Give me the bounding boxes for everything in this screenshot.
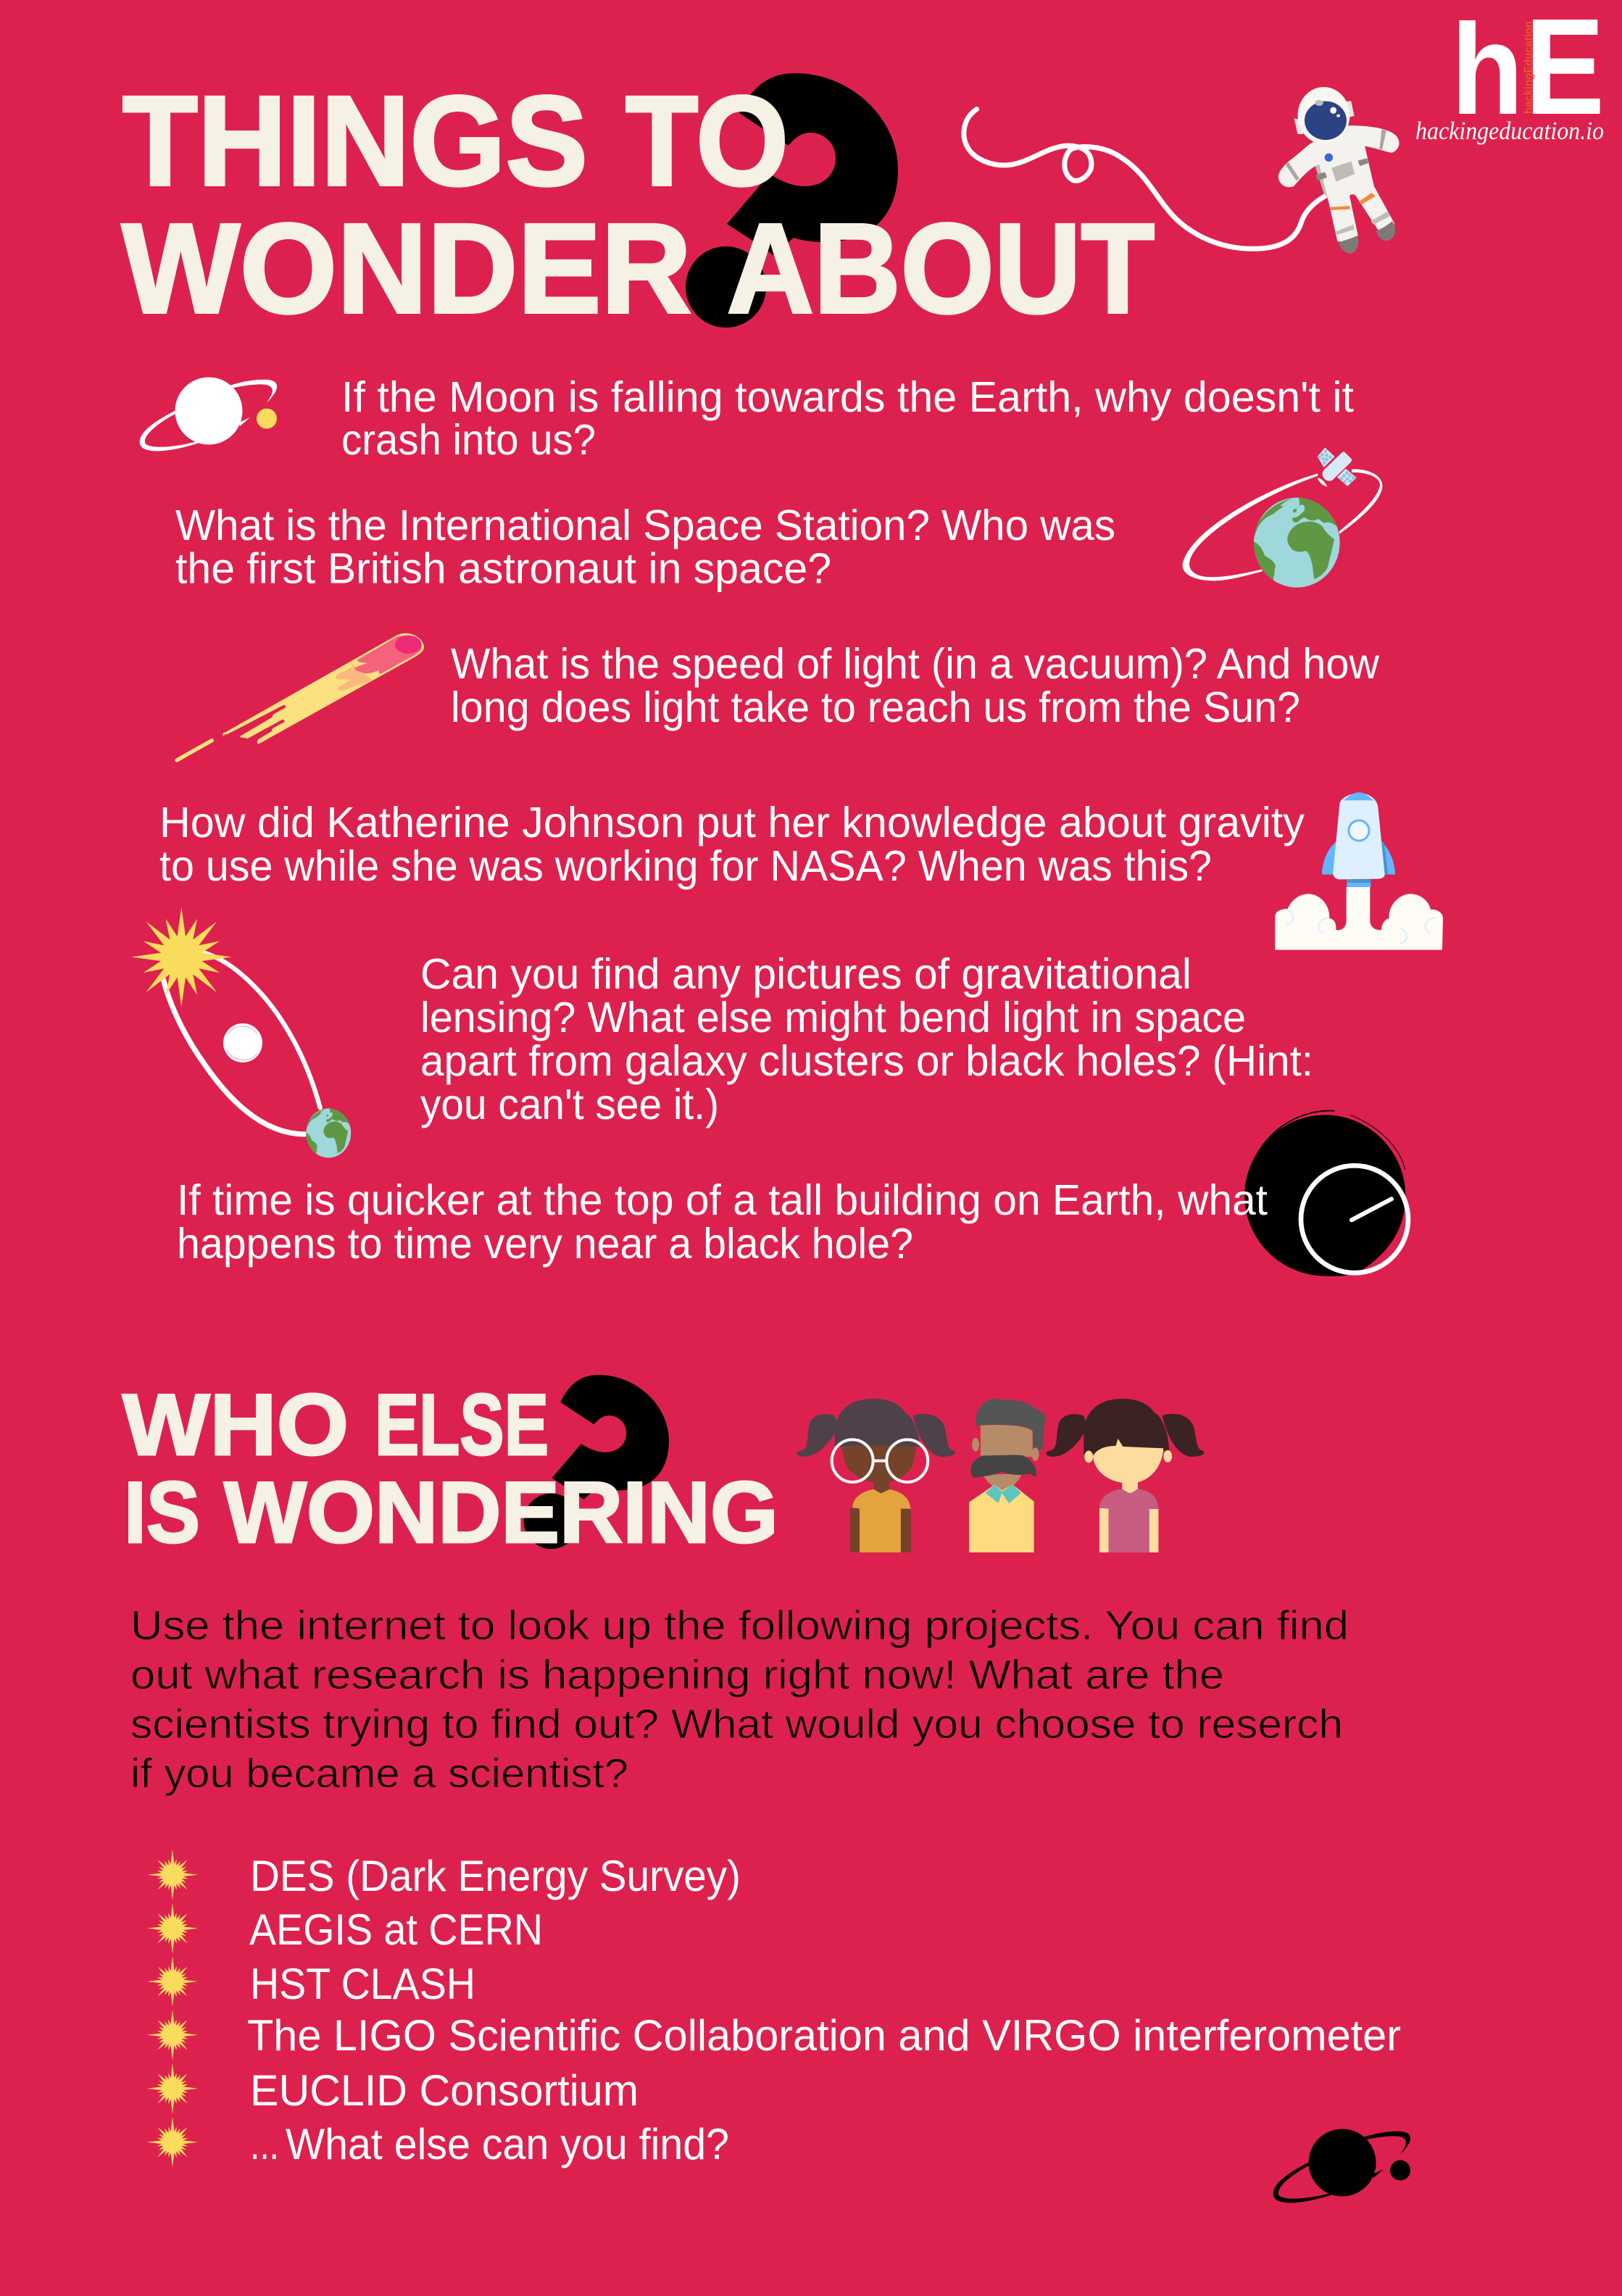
logo: hE hackingeducation.io: hackingEducation xyxy=(1523,21,1535,114)
text block: space station question xyxy=(175,502,1115,593)
logo: hE hackingeducation.io xyxy=(1415,0,1605,145)
icons: star bullets xyxy=(147,1850,198,2168)
text block: speed of light question xyxy=(451,640,1379,731)
text block: space station question: What is the International Space Station? Who was xyxy=(175,502,1115,549)
text block: Katherine Johnson question: How did Katherine Johnson put her knowledge about gravity xyxy=(159,799,1305,847)
icon: black planet with moon xyxy=(1273,2129,1410,2203)
text block: gravitational lensing question: you can't see it.) xyxy=(420,1081,719,1128)
logo: hE hackingeducation.io: hackingeducation.io xyxy=(1415,117,1604,145)
list: research projects: ... xyxy=(250,2120,279,2168)
text block: Katherine Johnson question: to use while she was working for NASA? When was this? xyxy=(159,842,1212,890)
text block: moon question xyxy=(341,373,1354,464)
text block: intro paragraph: out what research is happening right now! What are the xyxy=(130,1652,1224,1698)
heading: who else is wondering: IS xyxy=(124,1464,200,1561)
icon: black hole clock xyxy=(1244,1111,1408,1276)
text block: speed of light question: What is the speed of light (in a vacuum)? And how xyxy=(451,640,1379,688)
icon: large question mark behind title xyxy=(686,73,898,328)
girl with pigtails xyxy=(1046,1399,1204,1552)
text block: intro paragraph xyxy=(130,1602,1349,1797)
text block: gravitational lensing question: Can you find any pictures of gravitational xyxy=(420,950,1191,998)
icon: comet xyxy=(177,633,424,760)
person with glasses xyxy=(797,1399,955,1552)
text block: gravitational lensing question: lensing? What else might bend light in space xyxy=(420,994,1246,1041)
list: research projects: What else can you find? xyxy=(286,2120,729,2168)
title: THINGS xyxy=(122,70,588,212)
icon: astronaut with tether xyxy=(964,87,1400,254)
heading: who else is wondering: ELSE xyxy=(375,1376,549,1473)
text block: gravitational lensing question xyxy=(420,950,1313,1128)
text block: black hole time question: If time is quicker at the top of a tall building on Earth, what xyxy=(177,1176,1268,1224)
heading: who else is wondering xyxy=(122,1376,778,1561)
title: WONDER xyxy=(122,198,691,340)
icon: white planet with yellow moon xyxy=(140,377,277,451)
list: research projects: The LIGO Scientific Collaboration and VIRGO interferometer xyxy=(247,2011,1401,2060)
text block: Katherine Johnson question xyxy=(159,799,1305,890)
text block: space station question: the first British astronaut in space? xyxy=(175,545,831,593)
text block: black hole time question xyxy=(177,1176,1268,1268)
list: research projects: EUCLID Consortium xyxy=(250,2066,639,2115)
heading: who else is wondering: WHO xyxy=(122,1376,349,1473)
text block: intro paragraph: scientists trying to find out? What would you choose to reserch xyxy=(130,1701,1343,1747)
list: research projects: DES (Dark Energy Survey) xyxy=(250,1852,741,1900)
title: TO xyxy=(625,70,789,212)
text block: intro paragraph: Use the internet to look up the following projects. You can find xyxy=(130,1602,1349,1649)
icon: gravitational lensing diagram xyxy=(131,907,352,1157)
logo: hE hackingeducation.io: h xyxy=(1451,0,1523,141)
text block: moon question: If the Moon is falling towards the Earth, why doesn't it xyxy=(341,373,1354,421)
text block: speed of light question: long does light take to reach us from the Sun? xyxy=(451,683,1300,731)
text block: intro paragraph: if you became a scientist? xyxy=(130,1750,628,1797)
icon: rocket launch xyxy=(1275,792,1443,950)
text block: gravitational lensing question: apart from galaxy clusters or black holes? (Hint: xyxy=(420,1037,1313,1085)
heading: who else is wondering: WONDERING xyxy=(224,1464,778,1561)
list: research projects: HST CLASH xyxy=(250,1960,475,2008)
icon: earth with orbit and satellite xyxy=(1183,448,1382,588)
title xyxy=(122,70,1155,340)
icon: small question mark behind second heading xyxy=(524,1375,669,1549)
text block: black hole time question: happens to time very near a black hole? xyxy=(177,1220,913,1268)
text block: moon question: crash into us? xyxy=(341,416,596,464)
list: research projects xyxy=(247,1852,1401,2168)
title: ABOUT xyxy=(727,198,1155,340)
man with moustache xyxy=(969,1399,1046,1552)
list: research projects: AEGIS at CERN xyxy=(249,1905,543,1954)
icon: three people xyxy=(797,1399,1204,1552)
